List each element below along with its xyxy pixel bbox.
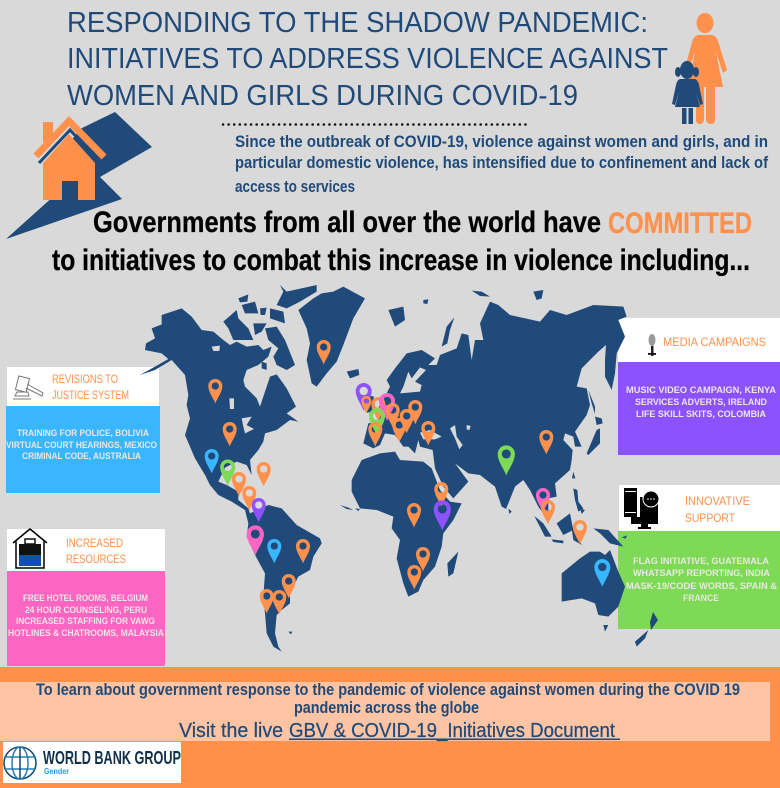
icon: gavel xyxy=(13,376,43,399)
intro text: access to services xyxy=(235,178,355,196)
icon: microphone xyxy=(648,334,656,356)
panel text: INCREASED STAFFING FOR VAWG xyxy=(16,616,155,627)
logo: World Bank Group xyxy=(3,742,181,783)
headline: Governments from all over the world have xyxy=(93,206,601,239)
pin: South Africa xyxy=(407,565,421,589)
pin: Central America xyxy=(232,472,246,496)
pin: Iberia xyxy=(368,422,382,446)
pin: Caribbean xyxy=(257,462,271,486)
panel text: LIFE SKILL SKITS, COLOMBIA xyxy=(636,409,766,420)
eurasia xyxy=(363,291,627,520)
pin: Indonesia xyxy=(573,520,587,544)
heading: innovative support: INNOVATIVE xyxy=(685,494,750,508)
pin: Chile xyxy=(260,589,274,613)
pin: Ethiopia xyxy=(434,482,448,506)
icon: devices with chat bubble xyxy=(624,488,659,529)
pin: Kenya purple xyxy=(434,500,451,530)
heading: revisions to justice system: JUSTICE SYSTEM xyxy=(52,388,129,402)
panel: increased resources xyxy=(7,529,165,666)
heading: innovative support: SUPPORT xyxy=(685,511,736,525)
heading: revisions to justice system xyxy=(52,372,129,402)
heading: revisions to justice system: REVISIONS TO xyxy=(52,372,118,386)
pin: Mexico green xyxy=(220,459,235,486)
pin: Panama xyxy=(242,486,256,510)
headline xyxy=(52,206,752,277)
pin: Singapore xyxy=(541,500,555,524)
pin: DR Congo xyxy=(407,503,421,527)
panel text: 24 HOUR COUNSELING, PERU xyxy=(25,605,147,616)
pin: India green xyxy=(498,445,515,475)
pin: France xyxy=(371,397,385,421)
heading: innovative support xyxy=(685,494,750,525)
footer text: Visit the live xyxy=(179,720,283,742)
pin: Canada xyxy=(208,379,222,403)
panel text: HOTLINES & CHATROOMS, MALAYSIA xyxy=(8,628,164,639)
footer xyxy=(0,667,780,788)
panel text: TRAINING FOR POLICE, BOLIVIA xyxy=(17,428,149,439)
panel text: FRANCE xyxy=(683,593,720,604)
pin: China xyxy=(539,430,553,454)
pin: UK small xyxy=(361,396,371,413)
panel text: FLAG INITIATIVE, GUATEMALA xyxy=(633,556,769,567)
pin: Zambia xyxy=(416,547,430,571)
logo: World Bank Group: Gender xyxy=(44,767,69,776)
panel text xyxy=(626,556,777,604)
footer text: GBV & COVID-19_Initiatives Document xyxy=(289,720,615,742)
pin: Germany xyxy=(386,403,400,427)
pin: Peru pink xyxy=(247,525,264,555)
pin: Argentina xyxy=(272,590,286,614)
pin: Brazil xyxy=(296,539,310,563)
pin: Malaysia pink xyxy=(536,488,550,512)
pin: Belgium pink xyxy=(379,393,395,421)
title: RESPONDING TO THE SHADOW PANDEMIC: xyxy=(67,7,648,39)
pin: Poland xyxy=(408,400,422,424)
pin: Turkey xyxy=(421,421,435,445)
panel: revisions to justice system xyxy=(6,367,160,493)
pin: north Mexico blue xyxy=(205,449,219,473)
title xyxy=(67,7,668,112)
panel text: SERVICES ADVERTS, IRELAND xyxy=(635,397,767,408)
new zealand north island xyxy=(650,612,658,630)
footer text xyxy=(36,680,740,742)
panel text: MUSIC VIDEO CAMPAIGN, KENYA xyxy=(626,385,776,396)
pin: Greenland xyxy=(317,340,331,364)
world map xyxy=(140,285,658,652)
heading: increased resources: RESOURCES xyxy=(66,552,126,566)
east asian islands xyxy=(508,290,603,514)
logo: World Bank Group: WORLD BANK GROUP xyxy=(43,748,181,768)
pin: Spain green xyxy=(369,408,385,436)
americas, arctic and greenland xyxy=(140,285,365,652)
panel: innovative support xyxy=(618,485,780,629)
icon: house on lightning bolt xyxy=(6,112,152,239)
panel text xyxy=(626,385,776,420)
pin: Uruguay xyxy=(282,574,296,598)
panel text: FREE HOTEL ROOMS, BELGIUM xyxy=(23,593,148,604)
icon: briefcase in house xyxy=(13,529,47,568)
map pins xyxy=(205,340,610,614)
dotted divider xyxy=(223,123,526,126)
pin: Colombia purple xyxy=(252,498,266,522)
panel text: CRIMINAL CODE, AUSTRALIA xyxy=(22,451,141,462)
heading: increased resources xyxy=(66,536,126,566)
icon: globe xyxy=(4,747,36,779)
pin: Ireland purple xyxy=(356,383,372,411)
oceania and southeast asia islands xyxy=(534,508,648,647)
panel text xyxy=(6,428,157,462)
footer text: pandemic across the globe xyxy=(294,698,479,717)
icon: woman and girl xyxy=(672,13,727,124)
title: WOMEN AND GIRLS DURING COVID-19 xyxy=(67,80,578,112)
panel text xyxy=(8,593,164,639)
panel text: WHATSAPP REPORTING, INDIA xyxy=(633,568,770,579)
pin: Italy xyxy=(392,418,406,442)
panel text: VIRTUAL COURT HEARINGS, MEXICO xyxy=(6,440,157,451)
heading: increased resources: INCREASED xyxy=(66,536,123,550)
pin: Bolivia blue xyxy=(267,539,281,563)
pin: Balkans xyxy=(400,409,414,433)
africa xyxy=(352,452,462,597)
pin: Australia blue xyxy=(594,559,610,587)
panel text: MASK-19/CODE WORDS, SPAIN & xyxy=(626,581,777,592)
intro text xyxy=(235,133,768,196)
pin: USA xyxy=(223,422,237,446)
heading: media campaigns: MEDIA CAMPAIGNS xyxy=(663,335,766,349)
panel: media campaigns xyxy=(618,318,780,455)
title: INITIATIVES TO ADDRESS VIOLENCE AGAINST xyxy=(67,43,668,75)
